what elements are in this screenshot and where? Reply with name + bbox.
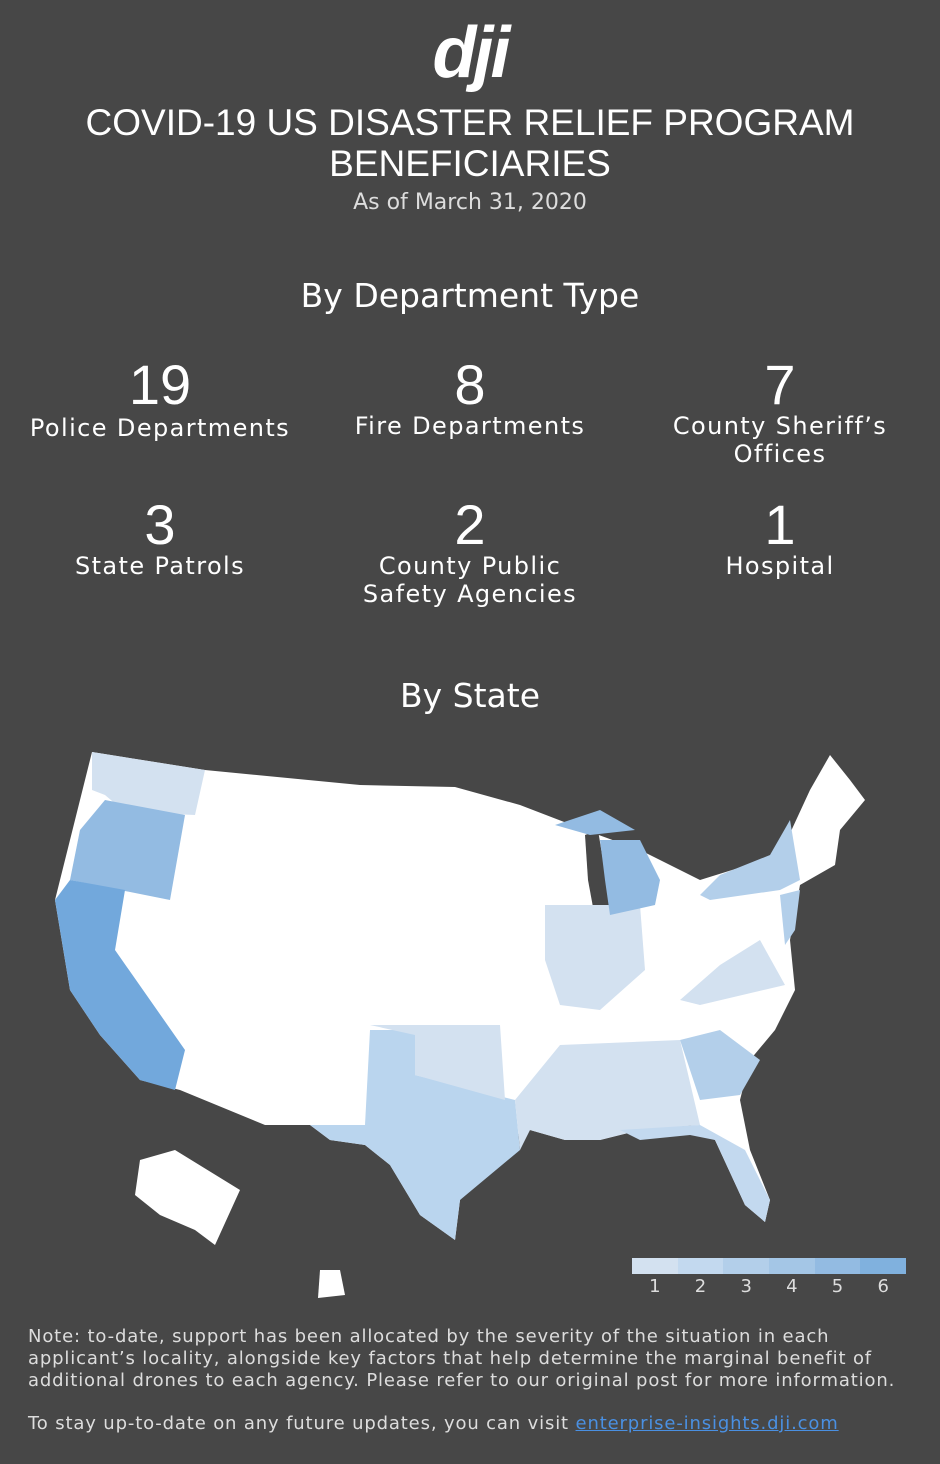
note text: Note: to-date, support has been allocated by the severity of the situation in each — [28, 1326, 829, 1347]
legend — [632, 1258, 906, 1297]
stat: sheriff: 7 — [764, 353, 796, 416]
stat: police: Police Departments — [30, 414, 290, 442]
legend: 6 — [877, 1276, 889, 1297]
stat: fire — [355, 353, 585, 440]
stat: hospital: 1 — [764, 493, 796, 556]
legend: 4 — [786, 1276, 798, 1297]
stat: police — [30, 353, 290, 442]
note text: applicant’s locality, alongside key factors that help determine the marginal benefit of — [28, 1348, 872, 1369]
stat: sheriff — [673, 353, 887, 468]
legend: 5 — [832, 1276, 843, 1297]
stat: county public safety: Safety Agencies — [363, 580, 577, 608]
stat: hospital — [725, 493, 835, 580]
heading: by department type: By Department Type — [301, 276, 639, 315]
title: COVID-19 US DISASTER RELIEF PROGRAM — [86, 102, 854, 143]
stat: hospital: Hospital — [725, 552, 835, 580]
stat: fire: Fire Departments — [355, 412, 585, 440]
stat: fire: 8 — [454, 353, 486, 416]
footer link: To stay up-to-date on any future updates, you can visit enterprise-insights.dji.com — [28, 1413, 839, 1434]
legend: 1 — [649, 1276, 661, 1297]
stat: county public safety — [363, 493, 577, 608]
stat: state patrols: 3 — [144, 493, 176, 556]
stat: state patrols: State Patrols — [75, 552, 245, 580]
stat: sheriff: Offices — [734, 440, 826, 468]
title — [86, 102, 854, 184]
stat: sheriff: County Sheriff’s — [673, 412, 887, 440]
logo: dji: dji — [432, 13, 508, 93]
note text: additional drones to each agency. Please refer to our original post for more information. — [28, 1370, 895, 1391]
stat: police: 19 — [129, 353, 191, 416]
alaska — [135, 1150, 240, 1245]
stat: state patrols — [75, 493, 245, 580]
stat: county public safety: 2 — [454, 493, 486, 556]
stat: county public safety: County Public — [379, 552, 561, 580]
legend: 3 — [740, 1276, 752, 1297]
note text — [28, 1326, 895, 1391]
legend: 2 — [695, 1276, 706, 1297]
heading: by state: By State — [400, 676, 540, 715]
subtitle date: As of March 31, 2020 — [353, 190, 587, 215]
hawaii — [318, 1270, 345, 1298]
title: BENEFICIARIES — [329, 143, 611, 184]
